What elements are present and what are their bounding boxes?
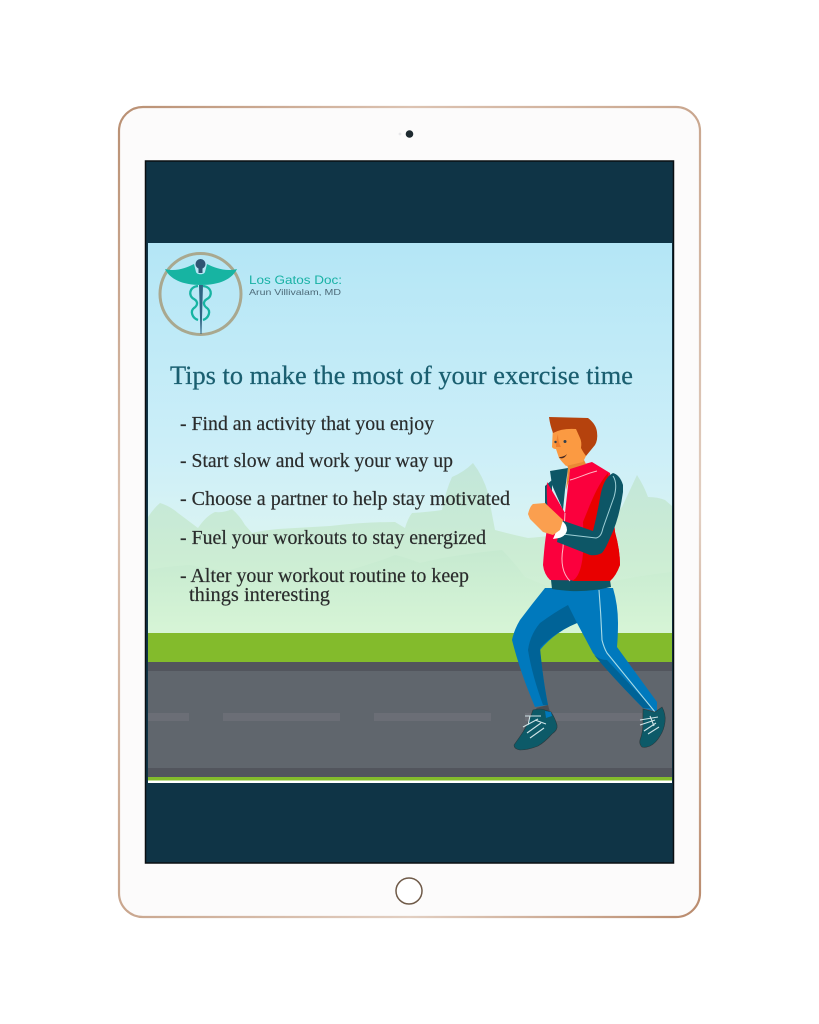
tip 1: - Find an activity that you enjoy: [180, 413, 434, 435]
tip 5: - Alter your workout routine to keep: [180, 565, 469, 587]
road edge stripes: [148, 777, 672, 783]
neck and face: [549, 417, 597, 490]
tablet device: [119, 107, 700, 917]
sleeve: [557, 473, 623, 555]
legs: [512, 588, 657, 714]
road dashes: [148, 713, 642, 721]
logo caduceus: [165, 259, 237, 334]
shoelaces: [523, 716, 659, 738]
tip 5: things interesting: [189, 584, 330, 606]
panel: outdoor scene background: [148, 243, 672, 783]
near hills: [148, 550, 672, 634]
hand: [528, 503, 563, 535]
far mountains: [148, 463, 672, 634]
screen frame: [146, 161, 674, 863]
sky: [148, 243, 672, 634]
cuff: [553, 520, 567, 539]
runner illustration: [512, 417, 665, 750]
tips list: [180, 413, 510, 606]
hair: [549, 417, 597, 456]
icon: camera: [399, 130, 413, 138]
shoes: [514, 707, 665, 750]
tip 5: [180, 565, 469, 606]
back arm: [545, 480, 552, 512]
logo text: Arun Villivalam, MD: [249, 287, 341, 297]
logo text: [249, 273, 342, 297]
tablet body: [119, 107, 700, 917]
title: Tips to make the most of your exercise time: [170, 361, 633, 390]
vest: [543, 462, 620, 581]
logo text: Los Gatos Doc:: [249, 273, 342, 287]
tip 3: - Choose a partner to help stay motivated: [180, 488, 510, 510]
logo ring: [160, 254, 241, 334]
road: [148, 662, 672, 777]
grass: [148, 633, 672, 662]
screen: [146, 161, 674, 863]
logo: [160, 254, 342, 334]
collar: [550, 468, 568, 510]
icon: home button: [396, 878, 422, 904]
waistband: [551, 580, 611, 591]
tip 4: - Fuel your workouts to stay energized: [180, 527, 486, 549]
tip 2: - Start slow and work your way up: [180, 450, 453, 472]
